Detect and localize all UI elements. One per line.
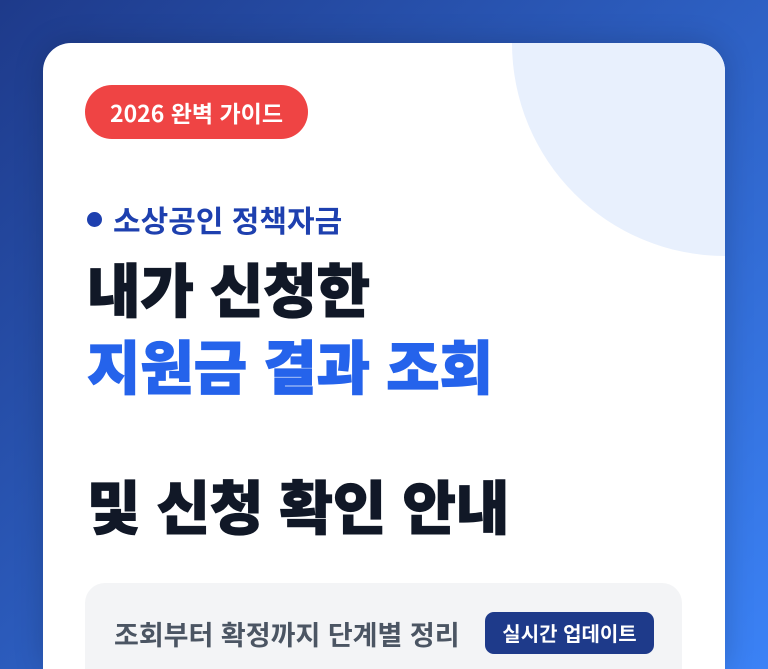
tag: live update bbox=[485, 612, 654, 654]
subtitle text: 소상공인 정책자금 bbox=[113, 197, 342, 241]
title line 2: 지원금 결과 조회 bbox=[87, 322, 493, 406]
panel: info box bbox=[85, 583, 682, 669]
title line 3: 및 신청 확인 안내 bbox=[87, 462, 509, 546]
badge: 2026 guide bbox=[85, 85, 308, 139]
tag: live update: 실시간 업데이트 bbox=[502, 618, 637, 647]
icon: dot bbox=[87, 212, 102, 227]
subtitle with dot bbox=[87, 197, 342, 241]
badge: 2026 guide: 2026 완벽 가이드 bbox=[110, 95, 283, 129]
info text: 조회부터 확정까지 단계별 정리 bbox=[114, 614, 460, 653]
title line 1: 내가 신청한 bbox=[87, 245, 370, 329]
